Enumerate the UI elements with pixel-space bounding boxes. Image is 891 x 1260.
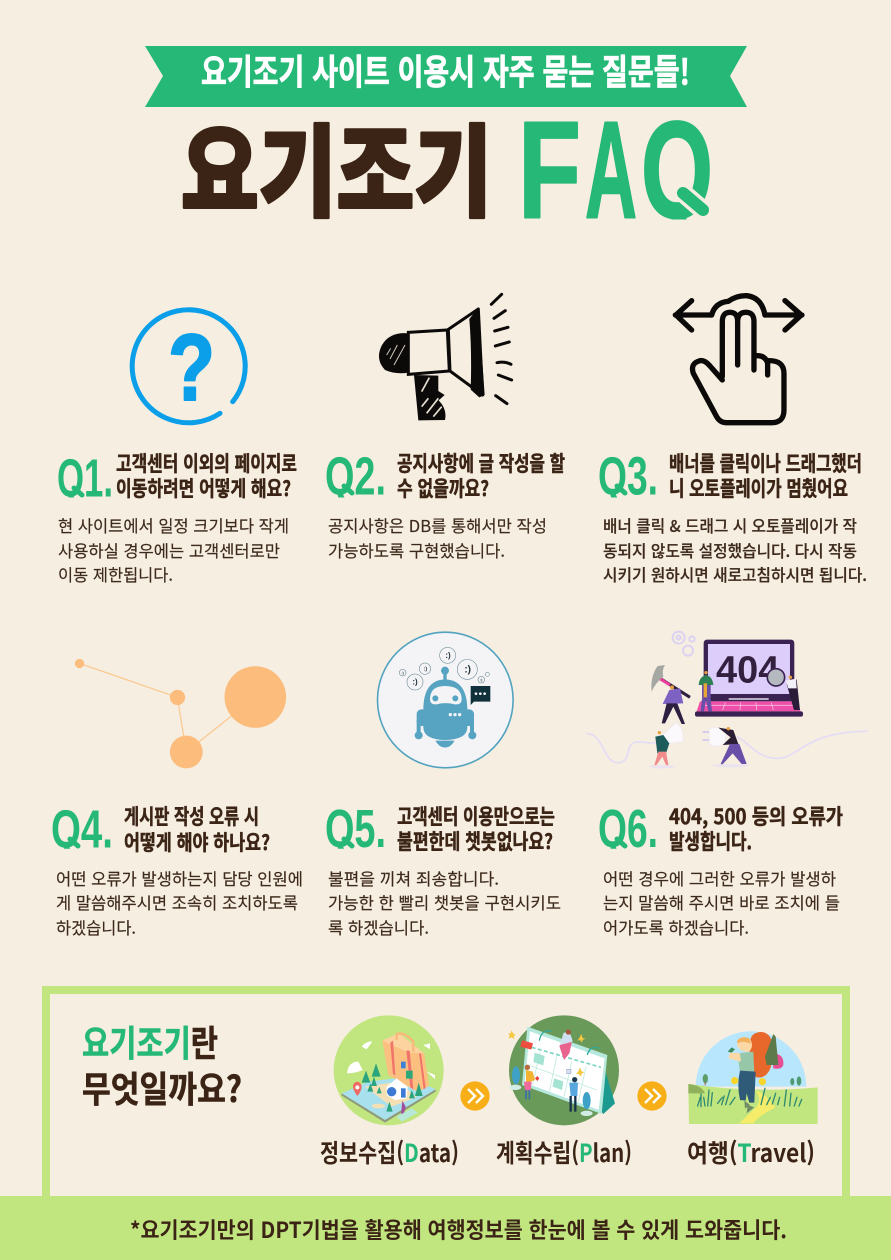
Q3: 시키기 원하시면 새로고침하시면 됩니다. xyxy=(603,562,867,586)
Q6: 는지 말씀해 주시면 바로 조치에 들 xyxy=(603,890,840,914)
Q5: 록 하겠습니다. xyxy=(328,915,429,939)
Q1: 현 사이트에서 일정 크기보다 작게 xyxy=(58,513,289,537)
panel heading: 무엇일까요? xyxy=(82,1061,242,1113)
Q1 xyxy=(57,448,297,586)
Q2: 수 없을까요? xyxy=(397,473,489,503)
Q4: 어떻게 해야 하나요? xyxy=(124,827,270,857)
title xyxy=(182,120,710,220)
Q6: Q6. xyxy=(598,799,658,859)
Q4 xyxy=(51,800,303,939)
title: Q xyxy=(641,94,713,248)
Q3 xyxy=(598,446,867,586)
Q6: 발생합니다. xyxy=(669,826,752,856)
panel heading: 요기조기란 xyxy=(82,1015,218,1067)
Q5: Q5. xyxy=(325,799,386,859)
Q6: 어가도록 하겠습니다. xyxy=(603,915,749,939)
Q5: 가능한 한 빨리 챗봇을 구현시키도 xyxy=(328,890,561,914)
icon: chatbot: :) xyxy=(464,665,471,676)
Q3: 니 오토플레이가 멈췄어요 xyxy=(669,473,848,503)
Q2: 가능하도록 구현했습니다. xyxy=(328,538,505,562)
Q3: 동되지 않도록 설정했습니다. 다시 작동 xyxy=(603,538,857,562)
Q4: 어떤 오류가 발생하는지 담당 인원에 xyxy=(56,866,303,890)
icon: chatbot: :) xyxy=(445,651,451,660)
arrow: plan to travel xyxy=(637,1081,667,1111)
workers xyxy=(699,675,713,685)
icon: chatbot: :) xyxy=(412,678,418,687)
label: data: 정보수집(Data) xyxy=(320,1134,459,1170)
Q1: 사용하실 경우에는 고객센터로만 xyxy=(58,538,280,562)
label: plan: 계획수립(Plan) xyxy=(496,1134,632,1170)
Q1: 고객센터 이외의 페이지로 xyxy=(116,448,297,478)
Q6 xyxy=(598,799,843,939)
Q1: 이동하려면 어떻게 해요? xyxy=(116,473,291,503)
illustration: plan xyxy=(508,1015,619,1125)
robot body xyxy=(415,667,476,748)
title: F xyxy=(518,94,581,248)
illustration: 404 error xyxy=(587,632,867,768)
smile bubbles xyxy=(399,647,489,690)
Q3: 배너 클릭 & 드래그 시 오토플레이가 작 xyxy=(603,513,857,537)
Q5 xyxy=(325,799,561,939)
title: 요기조기 xyxy=(181,92,492,237)
footer bar xyxy=(0,1196,891,1260)
Q4: Q4. xyxy=(51,800,113,860)
icon: chatbot: :) xyxy=(402,671,404,675)
Q3: Q3. xyxy=(598,446,658,506)
Q2 xyxy=(325,446,565,562)
icon: chatbot xyxy=(378,632,513,768)
illustration: travel xyxy=(688,1031,818,1124)
Q1: Q1. xyxy=(57,448,113,508)
icon: chatbot: :) xyxy=(424,667,427,673)
Q6: 어떤 경우에 그러한 오류가 발생하 xyxy=(603,866,836,890)
Q5: 고객센터 이용만으로는 xyxy=(397,801,555,831)
Q2: Q2. xyxy=(325,446,386,506)
icon: orange network xyxy=(75,659,286,768)
icon: chatbot: :) xyxy=(480,678,482,682)
arrow: data to plan xyxy=(460,1081,490,1111)
Q2: 공지사항에 글 작성을 할 xyxy=(397,448,565,478)
Q5: 불편을 끼쳐 죄송합니다. xyxy=(328,866,499,890)
icon: swipe hand xyxy=(675,296,802,423)
footer text: *요기조기만의 DPT기법을 활용해 여행정보를 한눈에 볼 수 있게 도와줍니다. xyxy=(130,1213,787,1245)
icon: question mark: ? xyxy=(168,315,215,421)
icon: question mark xyxy=(132,310,245,423)
label: travel: 여행(Travel) xyxy=(687,1134,815,1170)
Q tail xyxy=(682,192,704,211)
title: A xyxy=(585,94,637,248)
gears xyxy=(673,632,695,656)
panel heading xyxy=(82,1015,242,1113)
banner xyxy=(145,44,747,107)
panel: what is yogijogi xyxy=(46,990,846,1220)
banner text: 요기조기 사이트 이용시 자주 묻는 질문들! xyxy=(201,44,690,96)
Q4: 하겠습니다. xyxy=(56,915,136,939)
Q4: 게시판 작성 오류 시 xyxy=(124,801,259,831)
laptop xyxy=(704,640,794,701)
illustration: data xyxy=(334,1015,444,1125)
Q5: 불편한데 챗봇없나요? xyxy=(397,826,553,856)
icon: megaphone xyxy=(379,294,512,420)
Q4: 게 말씀해주시면 조속히 조치하도록 xyxy=(56,890,298,914)
Q2: 공지사항은 DB를 통해서만 작성 xyxy=(328,513,547,537)
illustration: 404 error: 404 xyxy=(716,648,780,691)
Q1: 이동 제한됩니다. xyxy=(58,562,173,586)
wire xyxy=(587,731,867,763)
Q6: 404, 500 등의 오류가 xyxy=(669,801,843,831)
